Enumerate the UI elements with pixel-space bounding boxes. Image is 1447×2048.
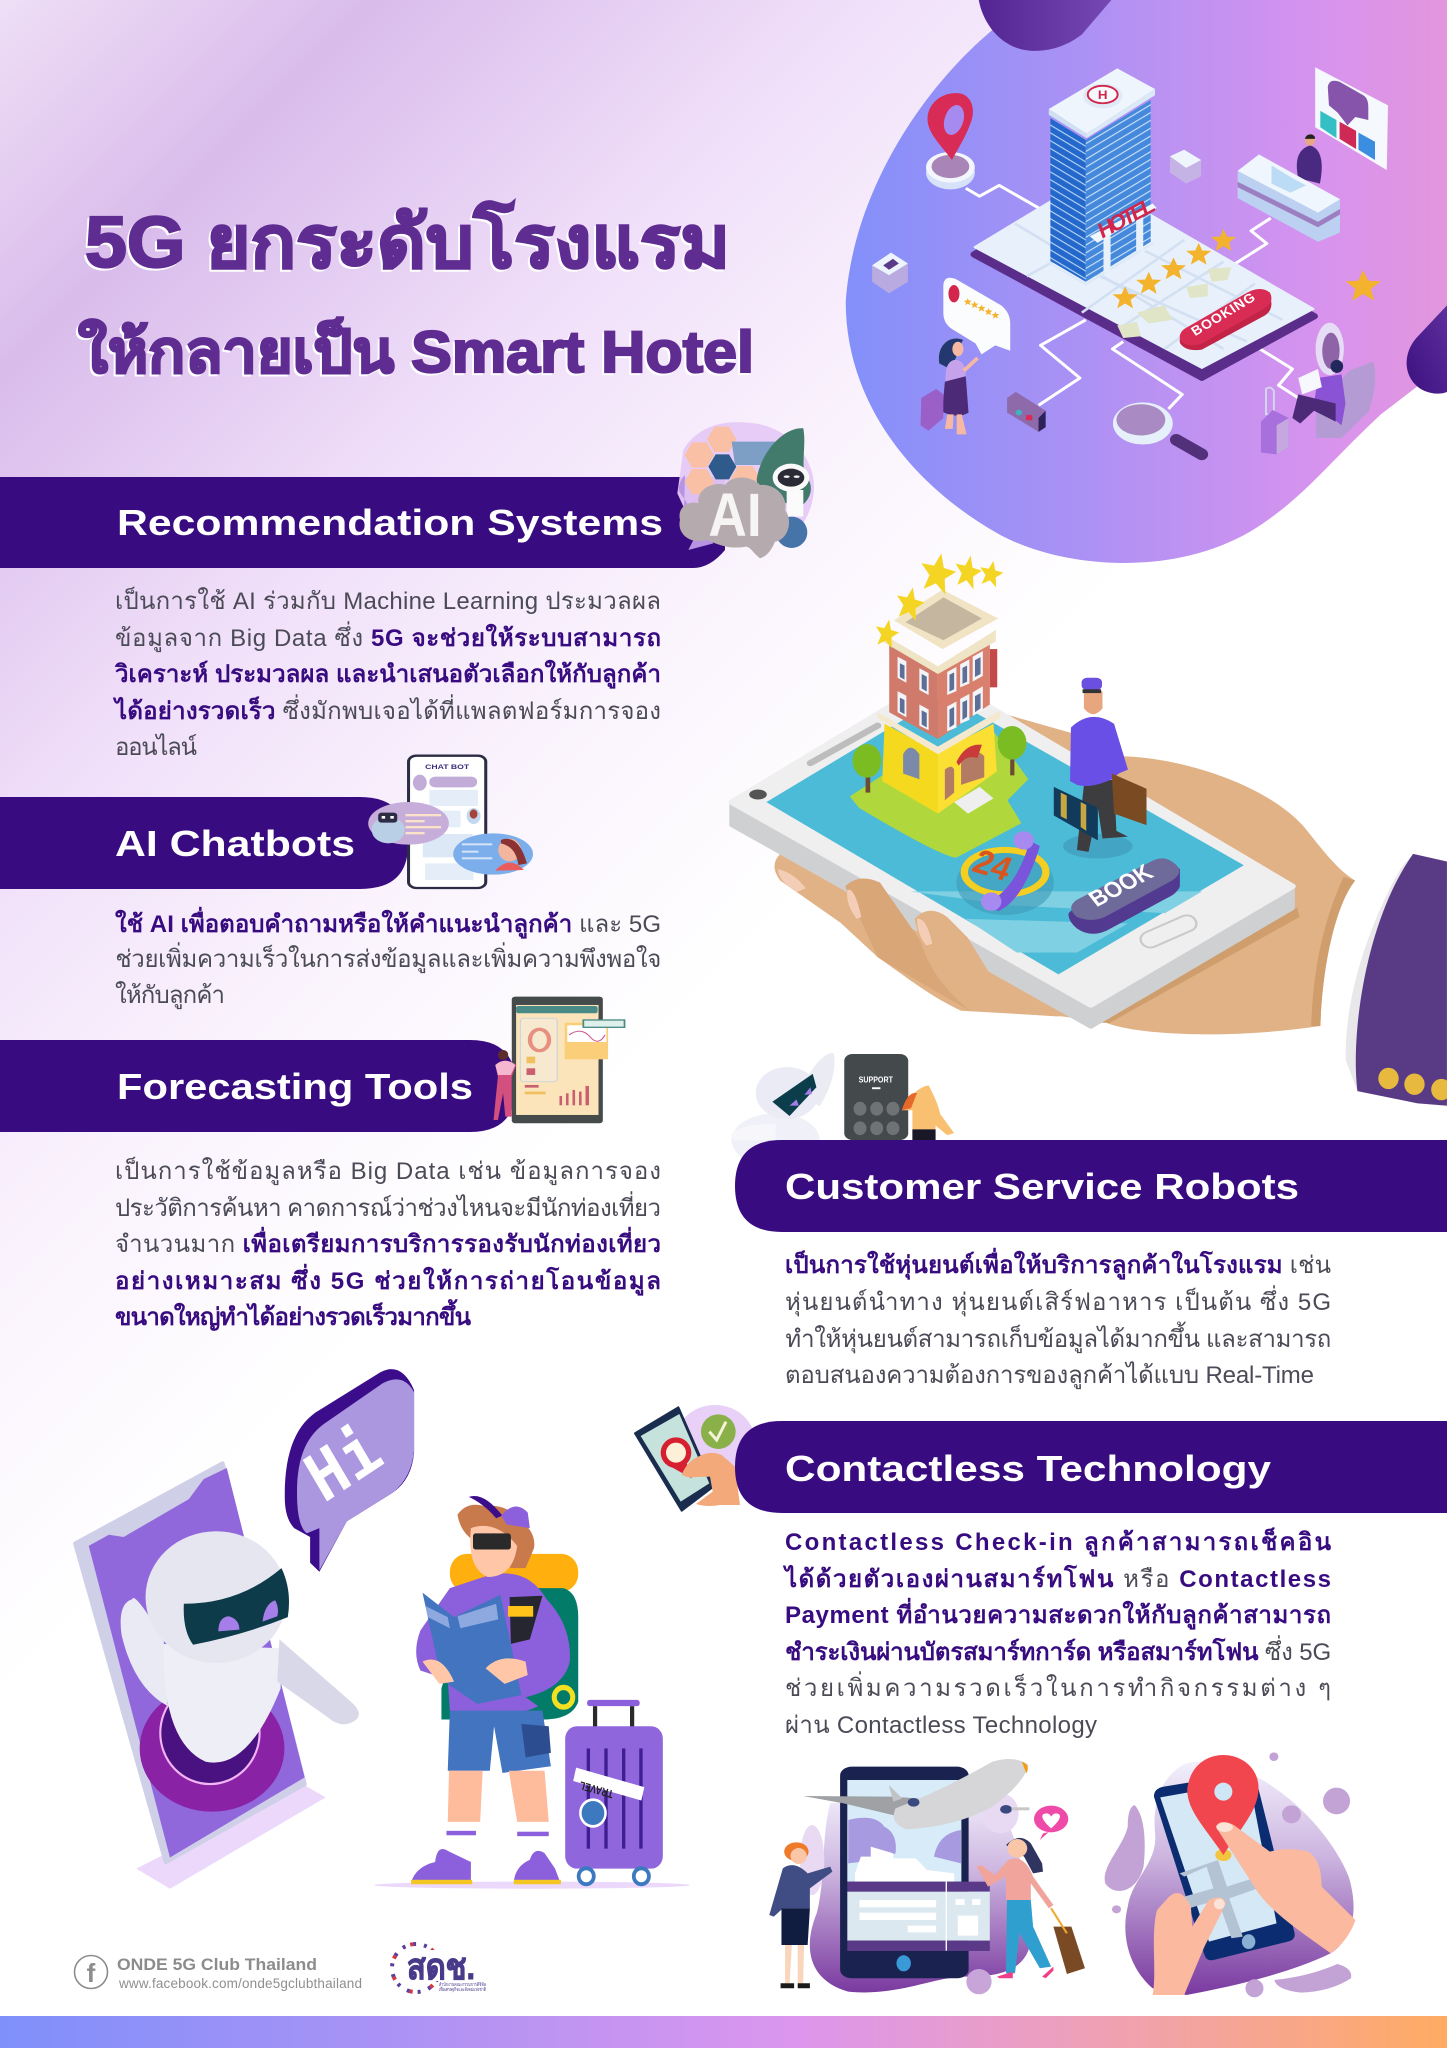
jacket <box>416 1573 570 1714</box>
map phone platform <box>974 179 1315 378</box>
decorative capsule top <box>979 0 1111 51</box>
footer: สดช logo <box>392 1944 486 1993</box>
head and hair <box>457 1505 534 1568</box>
legs and shoes <box>448 1771 549 1822</box>
body text: หุ่นยนต์นำทาง หุ่นยนต์เสิร์ฟอาหาร เป็นต้น ซึ่ง 5G <box>785 1285 1331 1317</box>
decorative capsule right <box>1407 305 1447 394</box>
backpack <box>441 1588 578 1720</box>
heading: AI Chatbots <box>115 823 355 864</box>
Hi speech bubble: Hi <box>293 1411 394 1518</box>
illustration: robot emerging from phone <box>75 1369 414 1889</box>
banner <box>0 797 408 889</box>
phone <box>75 1464 305 1862</box>
body text <box>785 1247 1331 1390</box>
body text: วิเคราะห์ ประมวลผล และนำเสนอตัวเลือกให้กับลูกค้า <box>114 659 661 689</box>
footer: สดช logo: สดช. <box>407 1946 475 1987</box>
heading: Customer Service Robots <box>785 1166 1299 1207</box>
suitcase: TRAVEL <box>578 1778 615 1800</box>
footer: สดช logo: เพื่อเศรษฐกิจและสังคมแห่งชาติ <box>439 1986 486 1993</box>
booking button <box>1180 289 1271 350</box>
banner <box>735 1140 1447 1232</box>
mini robot and support phone: SUPPORT <box>859 1075 893 1084</box>
decorative blobs <box>1105 1752 1351 1997</box>
body text: ช่วยเพิ่มความรวดเร็วในการทำกิจกรรมต่าง ๆ <box>785 1671 1331 1702</box>
illustration: hands using map phone <box>1105 1752 1355 1997</box>
body text: ได้ด้วยตัวเองผ่านสมาร์ทโฟน หรือ Contactless <box>782 1564 1331 1593</box>
heading: Contactless Technology <box>785 1448 1271 1489</box>
suitcase <box>565 1700 663 1884</box>
boarding ticket <box>847 1882 990 1951</box>
body text: เป็นการใช้ AI ร่วมกับ Machine Learning ประมวลผล <box>115 586 661 615</box>
icon: chat bot phone <box>368 756 533 888</box>
body text: ข้อมูลจาก Big Data ซึ่ง 5G จะช่วยให้ระบบสามารถ <box>115 621 661 653</box>
body text: Payment ที่อำนวยความสะดวกให้กับลูกค้าสามารถ <box>785 1597 1331 1630</box>
illustration: hand holding phone with hotel booking <box>731 549 1447 1167</box>
body text: Contactless Check-in ลูกค้าสามารถเช็คอิน <box>785 1527 1332 1557</box>
main title <box>78 199 754 385</box>
body text: เป็นการใช้ข้อมูลหรือ Big Data เช่น ข้อมูลการจอง <box>115 1156 661 1186</box>
bedroll <box>450 1554 578 1592</box>
section: AI Chatbots <box>0 756 661 1010</box>
airplane <box>803 1759 1029 1829</box>
map pin <box>1187 1755 1259 1861</box>
hero gradient blob <box>846 0 1447 563</box>
body text: จำนวนมาก เพื่อเตรียมการบริการรองรับนักท่องเที่ยว <box>115 1226 661 1258</box>
traveller woman <box>977 1838 1085 1978</box>
open guide book <box>422 1593 521 1704</box>
reception desk with clerk <box>1238 134 1340 242</box>
blob <box>1125 1762 1354 1995</box>
bellhop with luggage <box>1054 678 1147 858</box>
hotel tower: HOTEL <box>1095 192 1158 244</box>
heading: Recommendation Systems <box>117 502 663 543</box>
heading: Forecasting Tools <box>117 1066 473 1107</box>
man in seat with laptop <box>1292 323 1375 438</box>
icon: AI brain: AI <box>708 481 762 550</box>
illustration: traveler with map and suitcase <box>374 1496 690 1889</box>
body text: ได้อย่างรวดเร็ว ซึ่งมักพบเจอได้ที่แพลตฟอร์มการจอง <box>112 694 661 725</box>
body text: ตอบสนองความต้องการของลูกค้าได้แบบ Real-Time <box>785 1361 1314 1390</box>
footer gradient bar <box>0 2016 1447 2048</box>
icon: phone with map pin and hand <box>635 1405 755 1511</box>
phone body <box>732 677 1293 1027</box>
section: Forecasting Tools <box>0 997 661 1331</box>
floor shadow <box>374 1882 690 1889</box>
mini robot and support phone <box>731 1053 954 1167</box>
heart bubble <box>1034 1806 1068 1840</box>
hands <box>422 1658 528 1684</box>
body text <box>115 1156 661 1331</box>
Hi speech bubble <box>285 1369 414 1572</box>
trees <box>853 726 1026 793</box>
review board <box>1315 67 1388 170</box>
hero illustration: isometric smart hotel map <box>846 0 1447 563</box>
green island <box>850 731 1028 858</box>
suitcase icon <box>1007 392 1046 432</box>
small stacked cube top <box>1170 150 1201 184</box>
rating stars on map <box>1113 229 1381 308</box>
body text: ผ่าน Contactless Technology <box>785 1712 1097 1739</box>
portal ring <box>140 1685 284 1812</box>
illustration: airline ticket phone <box>769 1759 1085 1994</box>
body text <box>115 906 661 1010</box>
blob <box>810 1790 1029 1992</box>
hand <box>774 712 1355 1034</box>
icon: facebook <box>74 1956 108 1988</box>
book button <box>1069 858 1180 934</box>
book button: BOOK <box>1084 860 1158 912</box>
icon: chat bot phone: CHAT BOT <box>425 763 469 771</box>
icon: analytics tablet <box>494 997 625 1123</box>
body text: ขนาดใหญ่ทำได้อย่างรวดเร็วมากขึ้น <box>115 1298 472 1331</box>
floor shadow <box>136 1784 326 1889</box>
footer: Facebook credit <box>74 1955 362 1991</box>
body text: ช่วยเพิ่มความเร็วในการส่งข้อมูลและเพิ่มความพึงพอใจ <box>115 942 661 974</box>
footer: สดช logo: สำนักงานคณะกรรมการดิจิทัล <box>439 1981 486 1988</box>
body text: อย่างเหมาะสม ซึ่ง 5G ช่วยให้การถ่ายโอนข้อมูล <box>115 1263 661 1296</box>
title line 1: 5G ยกระดับโรงแรม <box>85 199 730 283</box>
small hotel building <box>878 590 1000 814</box>
body text: ใช้ AI เพื่อตอบคำถามหรือให้คำแนะนำลูกค้า และ 5G <box>115 906 661 939</box>
woman with rating bubble <box>921 278 1010 434</box>
body text: ให้กับลูกค้า <box>115 981 225 1010</box>
connector lines <box>966 185 1304 409</box>
hands <box>1153 1822 1355 1995</box>
gold stars above hotel <box>873 549 1005 650</box>
section: Contactless Technology <box>635 1405 1447 1739</box>
body text: ประวัติการค้นหา คาดการณ์ว่าช่วงไหนจะมีนักท่องเที่ยว <box>115 1191 661 1222</box>
icon: facebook: f <box>87 1958 96 1988</box>
body text <box>782 1527 1332 1739</box>
organisation name: ONDE 5G Club Thailand <box>117 1955 317 1974</box>
phone <box>1154 1773 1295 1960</box>
section: Recommendation Systems <box>0 422 814 761</box>
24h phone icon: 24 <box>967 842 1018 888</box>
section: Customer Service Robots <box>735 1140 1447 1390</box>
shorts <box>448 1711 551 1773</box>
hotel tower: H <box>1098 87 1108 102</box>
small stacked cube left <box>872 253 908 293</box>
facebook url: www.facebook.com/onde5gclubthailand <box>118 1976 362 1991</box>
phone <box>840 1767 969 1978</box>
flight attendant <box>769 1842 832 1988</box>
magnifying glass <box>1113 402 1202 454</box>
sleeve <box>1346 854 1447 1106</box>
rolling luggage <box>1261 387 1289 454</box>
banner <box>0 477 725 568</box>
body text: ออนไลน์ <box>115 733 197 761</box>
banner <box>735 1421 1447 1513</box>
title line 2: ให้กลายเป็น Smart Hotel <box>78 317 754 385</box>
booking button: BOOKING <box>1188 290 1258 339</box>
fingers <box>778 869 1058 1016</box>
hotel tower <box>1049 68 1158 286</box>
location pin with radar base <box>926 93 975 189</box>
body text: ชำระเงินผ่านบัตรสมาร์ทการ์ด หรือสมาร์ทโฟน ซึ่ง 5G <box>785 1635 1331 1666</box>
24h phone icon <box>956 831 1054 915</box>
icon: AI brain <box>677 422 814 558</box>
banner <box>0 1040 516 1132</box>
body text: เป็นการใช้หุ่นยนต์เพื่อให้บริการลูกค้าในโรงแรม เช่น <box>785 1247 1331 1281</box>
body text: ทำให้หุ่นยนต์สามารถเก็บข้อมูลได้มากขึ้น และสามารถ <box>785 1321 1331 1354</box>
robot <box>121 1531 359 1763</box>
body text <box>112 586 661 761</box>
